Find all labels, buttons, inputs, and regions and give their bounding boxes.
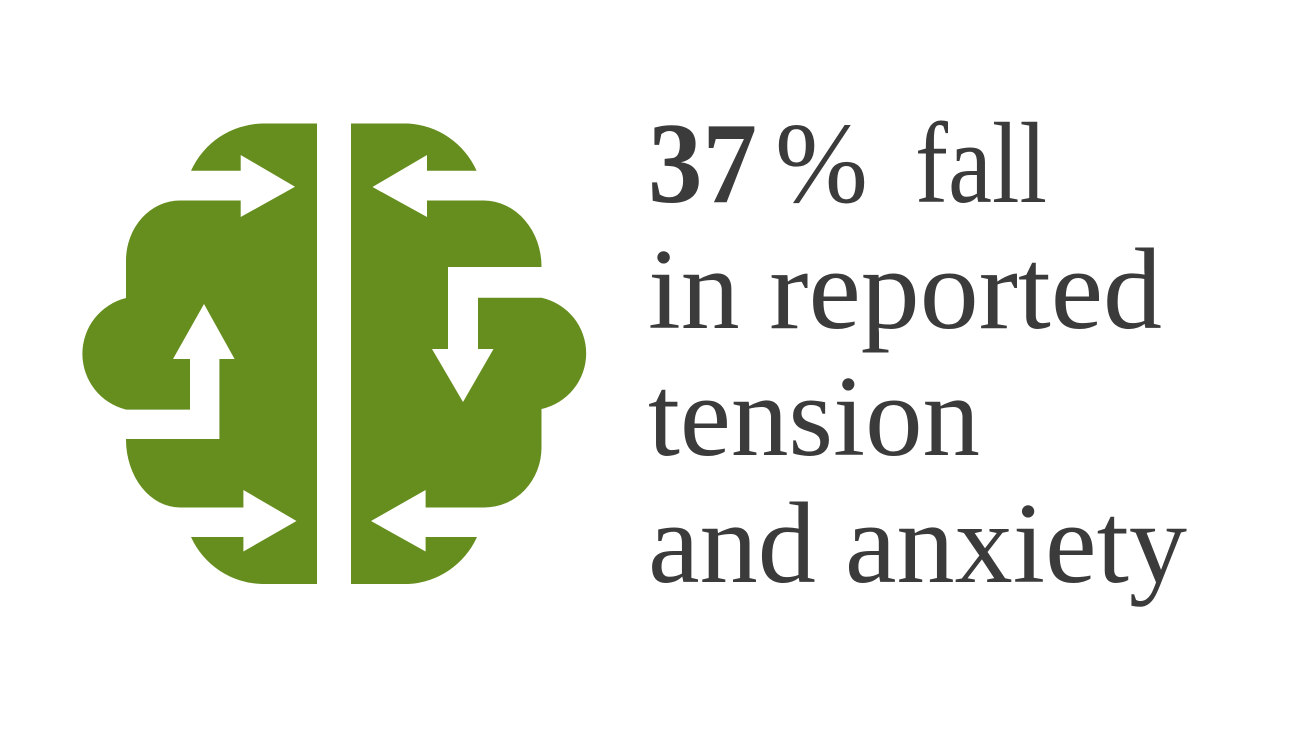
line 2: in reported: in reported	[648, 226, 1162, 354]
headline text	[648, 100, 1187, 608]
word: fall: fall	[915, 100, 1047, 228]
icon: right brain hemisphere with inward arrows	[351, 124, 586, 584]
icon: brain with arrows	[82, 124, 586, 584]
line 1: 37% fall	[648, 100, 1047, 228]
line 3: tension: tension	[648, 353, 980, 481]
icon: left brain hemisphere with inward arrows	[82, 124, 317, 584]
statistic number: 37	[648, 100, 757, 228]
percent sign: %	[775, 100, 868, 228]
line 4: and anxiety: and anxiety	[648, 480, 1187, 608]
